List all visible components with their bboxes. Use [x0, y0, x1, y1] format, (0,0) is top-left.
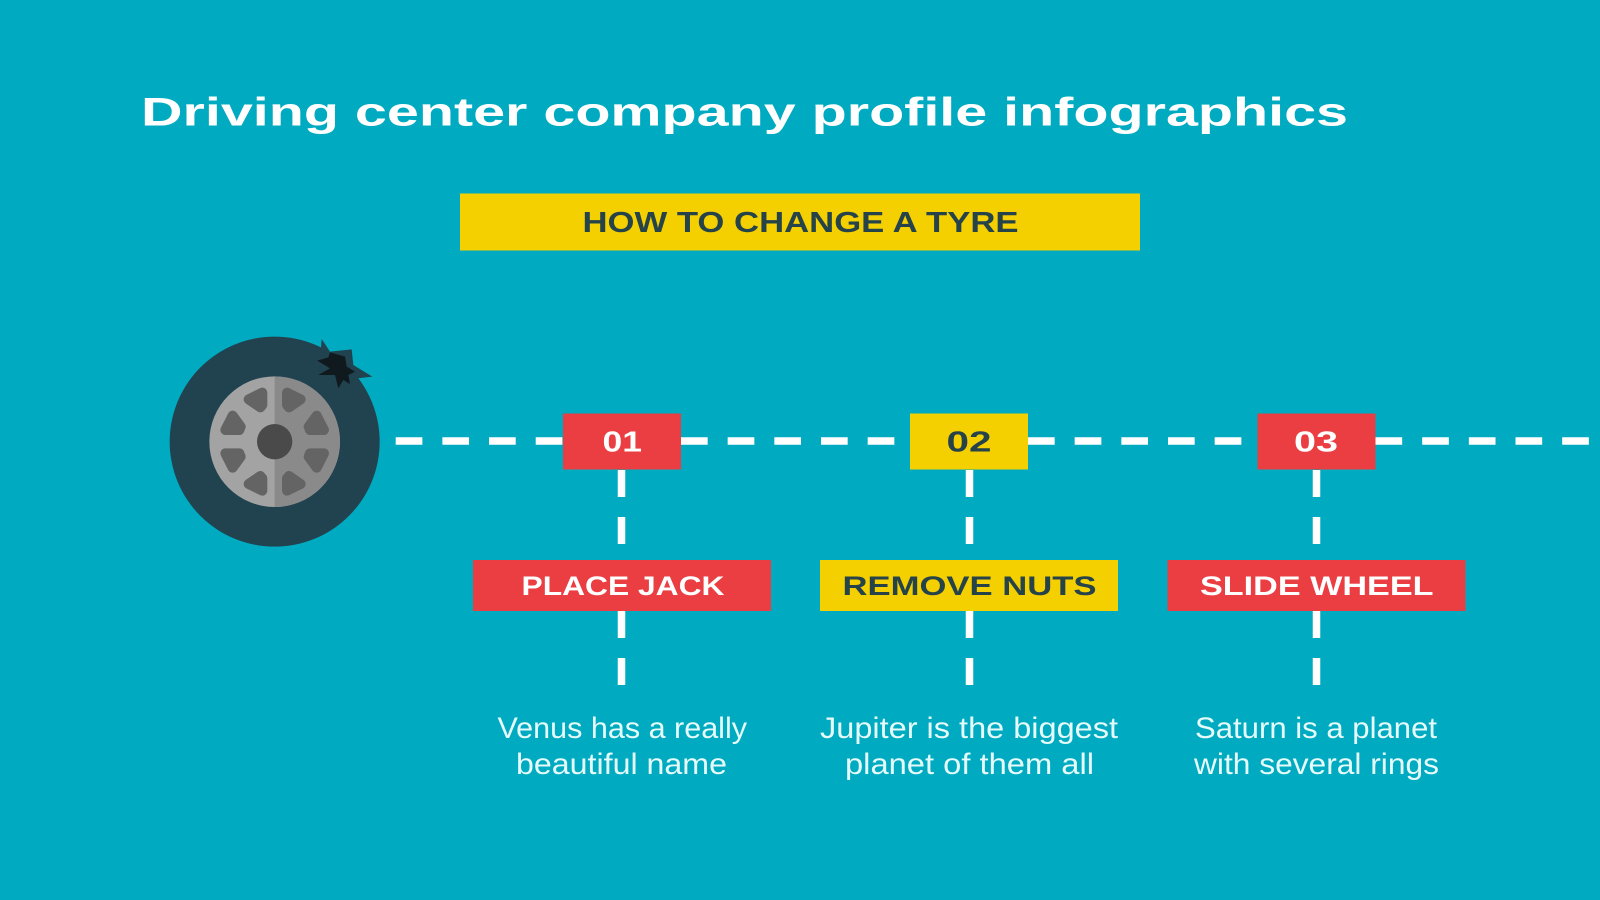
description 1: beautiful name [516, 748, 727, 781]
description 2 [820, 712, 1119, 781]
label: slide wheel [1168, 560, 1466, 611]
label: place jack [473, 560, 771, 611]
description 3: Saturn is a planet [1195, 712, 1438, 745]
description 1 [498, 712, 747, 781]
label: place jack: PLACE JACK [522, 571, 725, 601]
badge 02 [910, 414, 1028, 470]
label: remove nuts: REMOVE NUTS [842, 571, 1096, 601]
banner: how to change a tyre: HOW TO CHANGE A TYRE [582, 207, 1018, 239]
connector 1 [618, 470, 625, 685]
description 3 [1193, 712, 1439, 781]
label: remove nuts [820, 560, 1118, 611]
title: Driving center company profile infographics [141, 90, 1348, 134]
icon: punctured tyre [170, 337, 380, 547]
horizontal dashed line [396, 437, 1590, 445]
badge 03 [1258, 414, 1376, 470]
connector 3 [1313, 470, 1320, 685]
badge 01 [563, 414, 681, 470]
badge 01: 01 [602, 426, 642, 458]
description 2: Jupiter is the biggest [820, 712, 1119, 745]
badge 02: 02 [946, 426, 992, 458]
connector 2 [966, 470, 973, 685]
label: slide wheel: SLIDE WHEEL [1200, 571, 1434, 601]
step 2 [820, 414, 1119, 781]
description 2: planet of them all [845, 748, 1094, 781]
step 1 [473, 414, 771, 781]
step 3 [1168, 414, 1466, 781]
description 3: with several rings [1193, 748, 1439, 781]
banner: how to change a tyre [460, 194, 1140, 250]
badge 03: 03 [1294, 426, 1338, 458]
description 1: Venus has a really [498, 712, 747, 745]
